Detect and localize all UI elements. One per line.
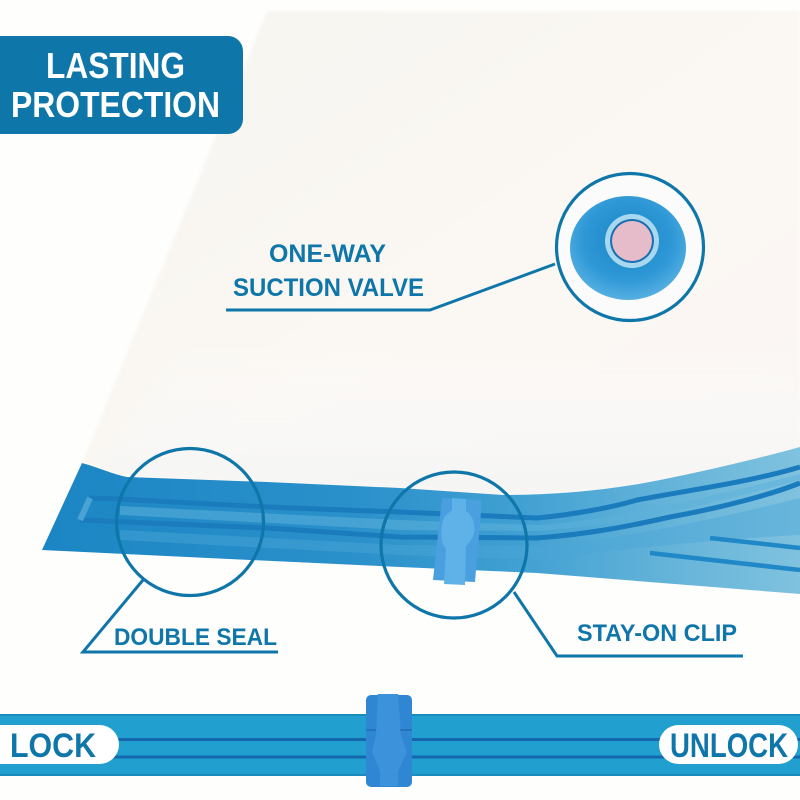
icon: slider clip — [366, 694, 412, 787]
lock pill: LOCK — [10, 727, 96, 765]
vacuum bag body — [82, 11, 800, 495]
title badge: PROTECTION — [11, 84, 220, 125]
light band under seals — [120, 498, 800, 560]
double seal callout circle — [116, 448, 264, 596]
stay-on clip leader line — [514, 592, 743, 656]
valve leader line — [226, 264, 555, 310]
title badge: LASTING — [46, 45, 185, 86]
icon: valve pink disc — [612, 221, 652, 261]
strip fold lines — [650, 538, 800, 570]
double seal leader line — [83, 580, 278, 652]
valve label: ONE-WAY — [269, 240, 386, 268]
title badge — [0, 36, 243, 134]
icon: stay-on clip — [433, 498, 482, 585]
double seal label: DOUBLE SEAL — [114, 624, 277, 651]
valve callout circle — [556, 174, 704, 320]
icon: valve ring — [605, 214, 659, 268]
zipper bar — [0, 694, 800, 787]
stay-on clip callout circle — [381, 472, 527, 618]
blue seal strip — [42, 447, 800, 594]
icon: valve base — [570, 196, 686, 300]
icon: valve inner ring — [610, 219, 654, 263]
zipper lines — [0, 740, 800, 757]
seal line: lower — [80, 483, 800, 538]
seal end — [80, 498, 90, 520]
light band between seals — [120, 474, 800, 531]
valve label: SUCTION VALVE — [233, 274, 424, 302]
valve label — [233, 240, 424, 302]
stay-on clip label: STAY-ON CLIP — [577, 620, 737, 647]
seal line: upper — [90, 467, 800, 518]
